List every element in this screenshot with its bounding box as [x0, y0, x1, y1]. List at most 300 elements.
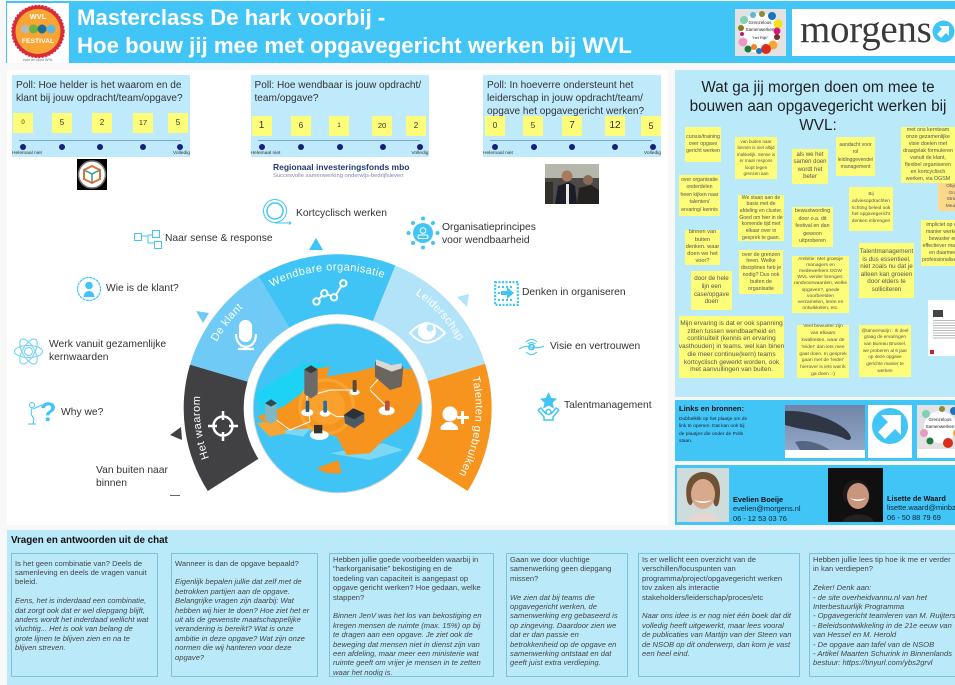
icon: vision: [518, 339, 544, 355]
icon: eye: [410, 322, 445, 342]
question card 6: - Opgavegericht teamleren van M. Ruijters: [813, 611, 955, 620]
sticky notes: @tannemarijn : Ik deel: [862, 328, 908, 333]
sticky notes: richting beleid ook: [852, 206, 890, 211]
sticky notes: van Bureau Brussel,: [864, 341, 906, 346]
sticky notes: [678, 127, 955, 378]
question card 3: "harkorganisatie" bekostiging en de: [333, 564, 452, 573]
question card 2: Wanneer is dan de opgave bepaald?: [175, 558, 299, 568]
sticky notes: werken, via OGSM: [906, 176, 950, 182]
poll 1: Helemaal niet: [12, 151, 42, 156]
panel: links and sources: [675, 400, 955, 461]
logo: morgens: morgens: [800, 9, 932, 51]
sticky notes: denken inbrengen: [852, 219, 890, 224]
question card 6: in kan verdiepen?: [813, 564, 873, 573]
question card 5: [638, 553, 800, 677]
poll 3: 12: [609, 120, 621, 131]
question card 3: stappen?: [333, 593, 364, 602]
small footnote dash: [170, 495, 180, 496]
icon: add user: [441, 406, 469, 430]
heading: WVL:: [799, 117, 837, 134]
question card 4: opgavegericht werken, de: [510, 602, 597, 611]
main white panel: [7, 70, 668, 525]
icon: question figure: [28, 397, 56, 427]
question card 4: Gaan we door vluchtige: [510, 555, 590, 564]
icon: customer: [76, 276, 102, 302]
question card 3: waar het nodig is.: [333, 668, 393, 677]
sticky notes: We staan aan de: [742, 195, 780, 201]
sticky notes: vanuit de klant,: [910, 155, 946, 161]
poll 2: Helemaal niet: [250, 151, 280, 156]
contact: Lisette de Waard: Lisette de Waard: [887, 494, 946, 503]
contact: Evelien Boeije: Evelien Boeije: [733, 495, 783, 504]
heading: [690, 79, 946, 134]
thumbnail: Grenzeloos: Samenwerken: [926, 424, 955, 429]
panel: questions and answers: [7, 530, 955, 685]
poll 1: Volledig: [173, 151, 190, 156]
segment: Talenten gebruiken: Talenten gebruiken: [459, 376, 483, 476]
thumbnail: morgens arrow: [868, 405, 912, 458]
document thumbnail: [928, 300, 955, 356]
poll 3: 7: [569, 120, 575, 131]
poll 1: [12, 75, 190, 157]
icon: microphone: [236, 321, 256, 349]
sticky notes: elkaar over in: [746, 228, 776, 234]
sticky notes: draagvlak formuleren: [903, 148, 953, 154]
question card 2: Belangrijke vragen zijn daarbij: Wat: [175, 596, 294, 605]
question card 4: We zien dat bij teams die: [510, 593, 595, 602]
logo: Grenzeloos Samenwerken: [735, 9, 786, 56]
question card 4: samenwerking geen diepgang: [510, 564, 611, 573]
poll 3: leiderschap in jouw opdracht/team/: [487, 93, 643, 104]
question card 2: uit als de gewenste maatschappelijke: [175, 615, 301, 624]
poll 3: 0: [493, 121, 497, 130]
sticky notes: managers en: [806, 263, 835, 268]
segment: De klant: De klant: [210, 304, 243, 342]
question card 5: de publicaties van Martijn van der Steen van: [642, 630, 791, 639]
sticky notes: door de hele: [694, 275, 729, 282]
sticky notes: medewerkers OGW: [799, 269, 842, 274]
poll 3: 5: [531, 121, 535, 130]
sticky notes: vasthouden) in teams. wel kan binen: [679, 343, 784, 350]
sticky notes: graag de ervaringen: [864, 334, 906, 339]
poll 2: Volledig: [411, 151, 428, 156]
sticky notes: management: [841, 164, 870, 170]
question card 4: geeft juist extra verdieping.: [510, 658, 601, 667]
sticky notes: als we het: [796, 152, 824, 158]
question card 5: een heel eind.: [642, 649, 690, 658]
sticky notes: gaan met de 'leider': [802, 358, 844, 363]
sticky notes: Talentmanagement: [860, 248, 913, 255]
poll 1: 5: [176, 118, 180, 127]
contact: Evelien Boeije: [733, 495, 800, 523]
poll 1: Poll: Hoe helder is het waarom en de: [16, 80, 182, 91]
question card 2: Eigenlijk bepalen jullie dat zelf met de: [175, 577, 302, 586]
segment: Leiderschap: Leiderschap: [416, 288, 462, 340]
instructions: staan.: [679, 439, 692, 444]
sticky notes: festival en dan: [795, 223, 830, 229]
logo: WVL festival: [7, 3, 69, 63]
segment: Leiderschap: [373, 266, 485, 381]
question card 4: op zingeving. Daardoor zien we: [510, 621, 616, 630]
sticky notes: binnen is niet altijd: [737, 145, 774, 150]
sticky notes: van buiten naar: [740, 138, 772, 144]
question card 4: [506, 553, 628, 677]
question card 1: dat zorgt ook dat er wel diepgang blijft,: [15, 606, 145, 615]
question card 3: een afdeling, maar meer een ministerie wat: [333, 649, 479, 658]
sticky notes: doen we het: [687, 251, 718, 257]
sticky notes: ervaring/ kennis: [681, 207, 718, 213]
sticky notes: zitten tussen wendbaarheid en: [687, 328, 776, 334]
question card 5: tov zaken als interactie: [642, 583, 719, 592]
poll 2: 1: [337, 122, 341, 129]
label: Van buiten naar binnen: Van buiten naar: [96, 465, 168, 476]
sticky notes: opgaven?, goede: [802, 288, 839, 293]
question card 2: hebben wij hier te doen? Hoe ziet het er: [175, 606, 309, 615]
heading: Links en bronnen:: [679, 404, 744, 413]
sticky notes: het opgavegericht: [852, 212, 890, 217]
poll 2: 2: [414, 121, 418, 130]
segment: Het waarom: [184, 364, 258, 491]
sticky notes: nodig? Dus ook: [743, 272, 779, 278]
question card 3: te dragen aan een opgave. Je ziet ook de: [333, 630, 473, 639]
segment: Het waarom: Het waarom: [194, 396, 209, 460]
sticky notes: voor?: [696, 258, 710, 264]
poll 3: opgave het opgavegericht werken?: [487, 106, 644, 117]
question card 1: blijven streven.: [15, 643, 66, 652]
sticky notes: door elders te: [867, 278, 906, 285]
sticky notes: kortcyclisch gewerkt worden, ook: [684, 359, 779, 366]
sticky notes: alleen kan groeien: [861, 270, 912, 278]
logo: Regionaal investeringsfonds mbo: Succesvolle samenwerking onderwijs-bedrijfsleven: [273, 173, 404, 179]
label: Organisatieprincipes voor wendbaarheid: [442, 222, 536, 246]
label: Kortcyclisch werken: Kortcyclisch werken: [296, 208, 387, 219]
segment: Wendbare organisatie: Wendbare organisatie: [268, 264, 384, 286]
logo: Grenzeloos Samenwerken: "het Rijk": [752, 35, 769, 40]
poll 3: [483, 75, 661, 157]
icon: connected nodes: [313, 280, 346, 305]
people: [306, 401, 309, 412]
poll 1: 5: [60, 118, 64, 127]
question card 2: [171, 553, 318, 677]
pads: [301, 409, 313, 416]
sticky notes: heen kijken naar: [680, 192, 719, 198]
contact: Lisette de Waard: 06 - 50 88 79 69: [887, 513, 941, 522]
question card 4: dat er dan passie en: [510, 630, 579, 639]
sticky notes: afdeling en cluster.: [740, 208, 782, 214]
question card 3: Hebben jullie goede voorbeelden waarbij in: [333, 555, 478, 564]
logo: Regionaal investeringsfonds mbo: Regionaal investeringsfonds mbo: [273, 162, 410, 172]
sticky notes: loopt tegen: [745, 164, 767, 170]
poll 2: 1: [259, 120, 264, 131]
question card 5: Naar ons idee is er nog niet één boek dat dit: [642, 611, 791, 620]
question card 6: Hebben jullie lees tip hoe ik me er verder: [813, 555, 951, 564]
sticky notes: hierover is iets wat ik: [800, 365, 846, 370]
question card 3: ruimte geeft om vrijer je mensen in te zetten: [333, 658, 481, 667]
label: Wie is de klant?: Wie is de klant?: [106, 283, 179, 294]
sticky notes: buiten de: [750, 279, 772, 285]
question card 1: beleid.: [15, 577, 37, 586]
logo: WVL festival: WVL: [30, 12, 47, 21]
question card 2: normen die wij hanteren voor deze: [175, 643, 292, 652]
label: Denken in organiseren: Denken in organiseren: [522, 287, 626, 298]
sticky notes: lijn een: [702, 283, 721, 290]
wheel diagram: [170, 238, 492, 494]
photo: Lisette de Waard: [828, 468, 883, 522]
contact: Evelien Boeije: 06 - 12 53 03 76: [733, 514, 787, 523]
question card 4: missen?: [510, 574, 538, 583]
question card 1: vluchtig... Het is ook van belang de: [15, 624, 133, 633]
sticky notes: basis met de: [747, 201, 775, 207]
sticky notes: Mijn ervaring is dat er ook spanning: [680, 320, 783, 327]
sticky notes: cursus/training: [686, 134, 720, 140]
logo: WVL festival: FESTIVAL: [22, 38, 54, 45]
sticky notes: gewoon: [803, 231, 822, 237]
sticky notes: werken: [877, 368, 893, 373]
segment: De klant: [190, 276, 290, 382]
question card 2: ambitie in deze opgave? Wat zijn onze: [175, 634, 305, 643]
question card 1: anders wordt het inderdaad wellicht wat: [15, 615, 148, 624]
sticky notes: denken. waar: [686, 244, 719, 250]
heading: chat questions: Vragen en antwoorden uit de chat: [11, 535, 168, 546]
question card 3: beweging dat mensen niet in dienst zijn van: [333, 640, 480, 649]
sticky notes: aandacht voor: [839, 142, 872, 148]
sticky notes: over de grenzen: [742, 252, 780, 258]
icon: question figure: ?: [40, 397, 56, 427]
poll 1: 0: [21, 120, 25, 126]
thumbnail: starlings: [785, 405, 865, 458]
label: Werk vanuit gezamenlijke kernwaarden: Werk vanuit gezamenlijke: [49, 339, 166, 350]
question card 3: toedeling van capaciteit is aangepast op: [333, 574, 468, 583]
sticky notes: er maar respons: [740, 158, 772, 163]
question card 5: Is er wellicht een overzicht van de: [642, 555, 756, 564]
sticky notes: gerichte manier te: [866, 361, 904, 366]
thumbnail: Grenzeloos: Grenzeloos: [928, 417, 952, 422]
sticky notes: ontwikkelen, etc.: [802, 306, 839, 311]
question card 4: samenwerking erg gebaseerd is: [510, 611, 618, 620]
question card 6: Interbestuurlijk Programma: [813, 602, 904, 611]
question card 4: betrokkenheid op de opgave en: [510, 640, 616, 649]
sticky notes: randvoorwaarden, welke: [794, 281, 847, 286]
sticky notes: organisatie: [748, 286, 774, 292]
thumbnail: Grenzeloos: [917, 405, 955, 458]
question card 1: Eens, het is inderdaad een combinatie,: [15, 596, 146, 605]
photo under poll 3: [545, 164, 599, 204]
question card 6: bestuur: https://tinyurl.com/ybs2grvl: [813, 658, 932, 667]
photo: Evelien Boeije: [677, 468, 729, 522]
sticky notes: makkelijk. Sense is: [737, 152, 775, 156]
logo: Grenzeloos Samenwerken: Samenwerken: [746, 27, 775, 32]
sticky notes: disciplines heb je: [741, 265, 781, 271]
label: Van buiten naar binnen: [96, 465, 168, 489]
question card 6: Zeker! Denk aan:: [813, 583, 871, 592]
logo: Regionaal investeringsfonds mbo: [273, 162, 410, 179]
sticky notes: gaat doen. In gesprek: [799, 352, 847, 356]
sticky notes: kwaliteiten, waar de: [802, 338, 844, 343]
sticky notes: over organisatie: [681, 177, 718, 183]
label: Organisatieprincipes voor wendbaarheid: Organisatieprincipes: [442, 222, 536, 233]
question card 6: van Hessel en M. Herold: [813, 630, 896, 639]
question card 3: [329, 553, 494, 677]
poll 2: 20: [378, 121, 386, 130]
sticky notes: is dus essentieel,: [862, 256, 911, 262]
sticky notes: buiten: [695, 237, 710, 243]
sticky notes: wordt het: [798, 166, 822, 172]
instructions: link te openen. Dat kan ook bij: [679, 424, 745, 429]
label: Talentmanagement: Talentmanagement: [564, 400, 652, 411]
question card 5: volledig heeft uitgewerkt, maar lees vooral: [642, 621, 784, 630]
logo under poll 1: [77, 159, 107, 190]
sticky notes: heen. Welke: [746, 258, 776, 264]
sticky notes: Veel bewuster zijn: [803, 324, 843, 329]
logo: WVL festival: voor en door WVL: [23, 58, 53, 62]
label: Organisatieprincipes voor wendbaarheid: voor wendbaarheid: [442, 235, 530, 246]
question card 2: betrokken partijen aan de opgave.: [175, 587, 290, 596]
sticky notes: leidinggevende/: [838, 156, 873, 162]
sticky notes: gesprek te gaan.: [742, 235, 780, 241]
sticky notes: uitproberen: [799, 238, 826, 244]
poll 1: klant bij jouw opdracht/team/opgave?: [16, 93, 183, 104]
question card 6: - Beleidsontwikkeling in de 21e eeuw van: [813, 621, 952, 630]
sticky notes: met aanvullingen van buiten.: [690, 366, 773, 373]
sticky notes: case/opgave: [694, 290, 729, 298]
sticky notes: komende tijd met: [742, 221, 780, 227]
buildings: [304, 365, 318, 398]
icon: dotted arrow square: [494, 281, 519, 306]
sticky notes: beter: [803, 174, 817, 180]
icon: star figure: [538, 392, 560, 421]
sticky notes: met ons kernteam: [907, 127, 949, 133]
question card 6: - de site overheidvannu.nl van het: [813, 593, 927, 602]
title: Hoe bouw jij mee met opgavegericht werken bij WVL: [77, 33, 632, 58]
icon: organisation principles: [406, 216, 440, 250]
contact: Evelien Boeije: evelien@morgens.nl: [733, 504, 800, 513]
label: Van buiten naar binnen: binnen: [96, 478, 127, 489]
icon: atom: [14, 338, 43, 365]
sticky notes: verzamelen, leren en: [798, 300, 843, 305]
sticky notes: WVL verder brengen:: [797, 275, 844, 280]
sticky notes: Goed om hier in de: [739, 215, 783, 221]
sticky notes: Bij: [868, 192, 874, 197]
poll 1: 17: [139, 118, 147, 127]
globe with map: [250, 320, 427, 497]
sticky notes: continuïteit (kennis en ervaring: [687, 335, 776, 342]
question card 6: - De opgave aan tafel van de NSOB: [813, 640, 934, 649]
icon: sense and response: [134, 230, 162, 249]
question card 1: [11, 553, 158, 677]
question card 1: grote lijnen te blijven zien en na te: [15, 634, 130, 643]
heading: bouwen aan opgavegericht werken bij: [690, 98, 946, 115]
sticky notes: solliciteren: [872, 286, 901, 292]
question card 1: samenleving en deels de vragen vanuit: [15, 568, 147, 577]
sticky notes: visie doelen met: [909, 141, 947, 147]
label: Werk vanuit gezamenlijke kernwaarden: [49, 339, 166, 363]
sticky notes: binnen van: [689, 229, 716, 235]
header banner: [6, 1, 955, 63]
question card 5: verschillen/focuspunten van: [642, 564, 736, 573]
poll 2: Poll: Hoe wendbaar is jouw opdracht/: [254, 80, 421, 91]
question card 3: kregen mensen de ruimte (max. 15%) op bij: [333, 621, 480, 630]
question card 5: stakeholders/leiderschap/proces/etc: [642, 593, 763, 602]
markers: small triangles: [170, 238, 469, 440]
connection lines: [276, 379, 385, 430]
question card 6: - Artikel Maarten Schurink in Binnenlands: [813, 649, 952, 658]
poll 2: team/opgave?: [254, 93, 318, 104]
segment: Wendbare organisatie: [258, 254, 396, 328]
sticky notes: over opgave: [689, 141, 717, 147]
sticky notes: grenzen aan: [743, 171, 768, 176]
sticky notes: door o.a. dit: [798, 216, 826, 222]
sticky notes: bewustwording: [795, 208, 830, 214]
sticky notes: rol: [853, 149, 858, 155]
icon: short cycle: [263, 199, 292, 225]
question card 2: verandering is bereikt? Wat is onze: [175, 624, 293, 633]
sticky notes: ga doen :-): [811, 372, 835, 377]
question card 6: [809, 553, 955, 677]
poll 3: Poll: In hoeverre ondersteunt het: [487, 80, 633, 91]
poll 2: [250, 75, 428, 157]
question card 5: de NSOB op dit onderwerp, dan kom je vast: [642, 640, 790, 649]
panel: contacts: [675, 465, 955, 525]
label: Why we?: Why we?: [61, 407, 103, 418]
sticky notes: niet zoals nu dat je: [860, 263, 913, 270]
sticky notes: van elkaars: [810, 331, 836, 336]
sticky notes: talenten/: [690, 199, 709, 205]
sticky notes: samen doen: [793, 159, 827, 165]
label: Visie en vertrouwen: Visie en vertrouwen: [550, 341, 640, 352]
water: [255, 363, 327, 417]
poll 3: 5: [648, 121, 654, 131]
segment: Talenten gebruiken: [417, 364, 492, 491]
poll 2: 6: [299, 121, 303, 130]
contact: Lisette de Waard: [887, 494, 955, 522]
sticky notes: voorbeelden: [807, 294, 834, 299]
sticky notes: flexibel organiseren: [905, 162, 951, 168]
instructions: [679, 416, 747, 444]
question card 1: Is het geen combinatie van? Deels de: [15, 558, 142, 568]
poll 1: 2: [100, 118, 104, 127]
poll 3: Helemaal niet: [483, 151, 513, 156]
sticky notes: onze gezamenlijke: [906, 134, 950, 140]
title: [77, 5, 632, 58]
instructions: Dubbelklik op het plaatje om de: [679, 417, 747, 422]
poll 3: Volledig: [644, 151, 661, 156]
instructions: de plaatjes die onder de Polls: [679, 432, 743, 437]
title: Masterclass De hark voorbij -: [77, 5, 385, 30]
label: Werk vanuit gezamenlijke kernwaarden: kernwaarden: [49, 352, 109, 363]
sticky notes: die meer continue(kern) teams: [687, 351, 776, 358]
question card 5: programma/project/opgavegericht werken: [642, 574, 782, 583]
panel: what will you do tomorrow: [675, 70, 955, 397]
label: Naar sense & response: Naar sense & response: [165, 233, 273, 244]
sticky notes: doen: [705, 298, 718, 305]
icon: target: [208, 411, 238, 441]
question card 3: opgave gericht werken? Hoe gedaan, welke: [333, 583, 481, 592]
question card 2: opgave?: [175, 653, 204, 662]
question card 3: Binnen JenV was het los van bekostiging en: [333, 611, 482, 620]
sticky notes: op deze opgave: [868, 354, 902, 359]
mainland: [257, 367, 423, 455]
sticky notes: en kortcyclisch: [911, 169, 945, 175]
sticky notes: adviesopdrachten: [852, 199, 890, 204]
heading: Wat ga jij morgen doen om mee te: [701, 79, 935, 96]
sticky notes: 'leider' dan iets mee: [801, 345, 845, 350]
sticky notes: onderdelen: [686, 184, 712, 190]
sticky notes: gericht werken: [686, 148, 720, 154]
question card 4: samenwerking ontstaat en dat: [510, 649, 611, 658]
sticky notes: Ambitie: Met groepje: [798, 257, 843, 262]
sticky notes: we proberen al 6 jaar: [863, 348, 907, 353]
logo: Grenzeloos Samenwerken: Grenzeloos: [748, 20, 772, 25]
